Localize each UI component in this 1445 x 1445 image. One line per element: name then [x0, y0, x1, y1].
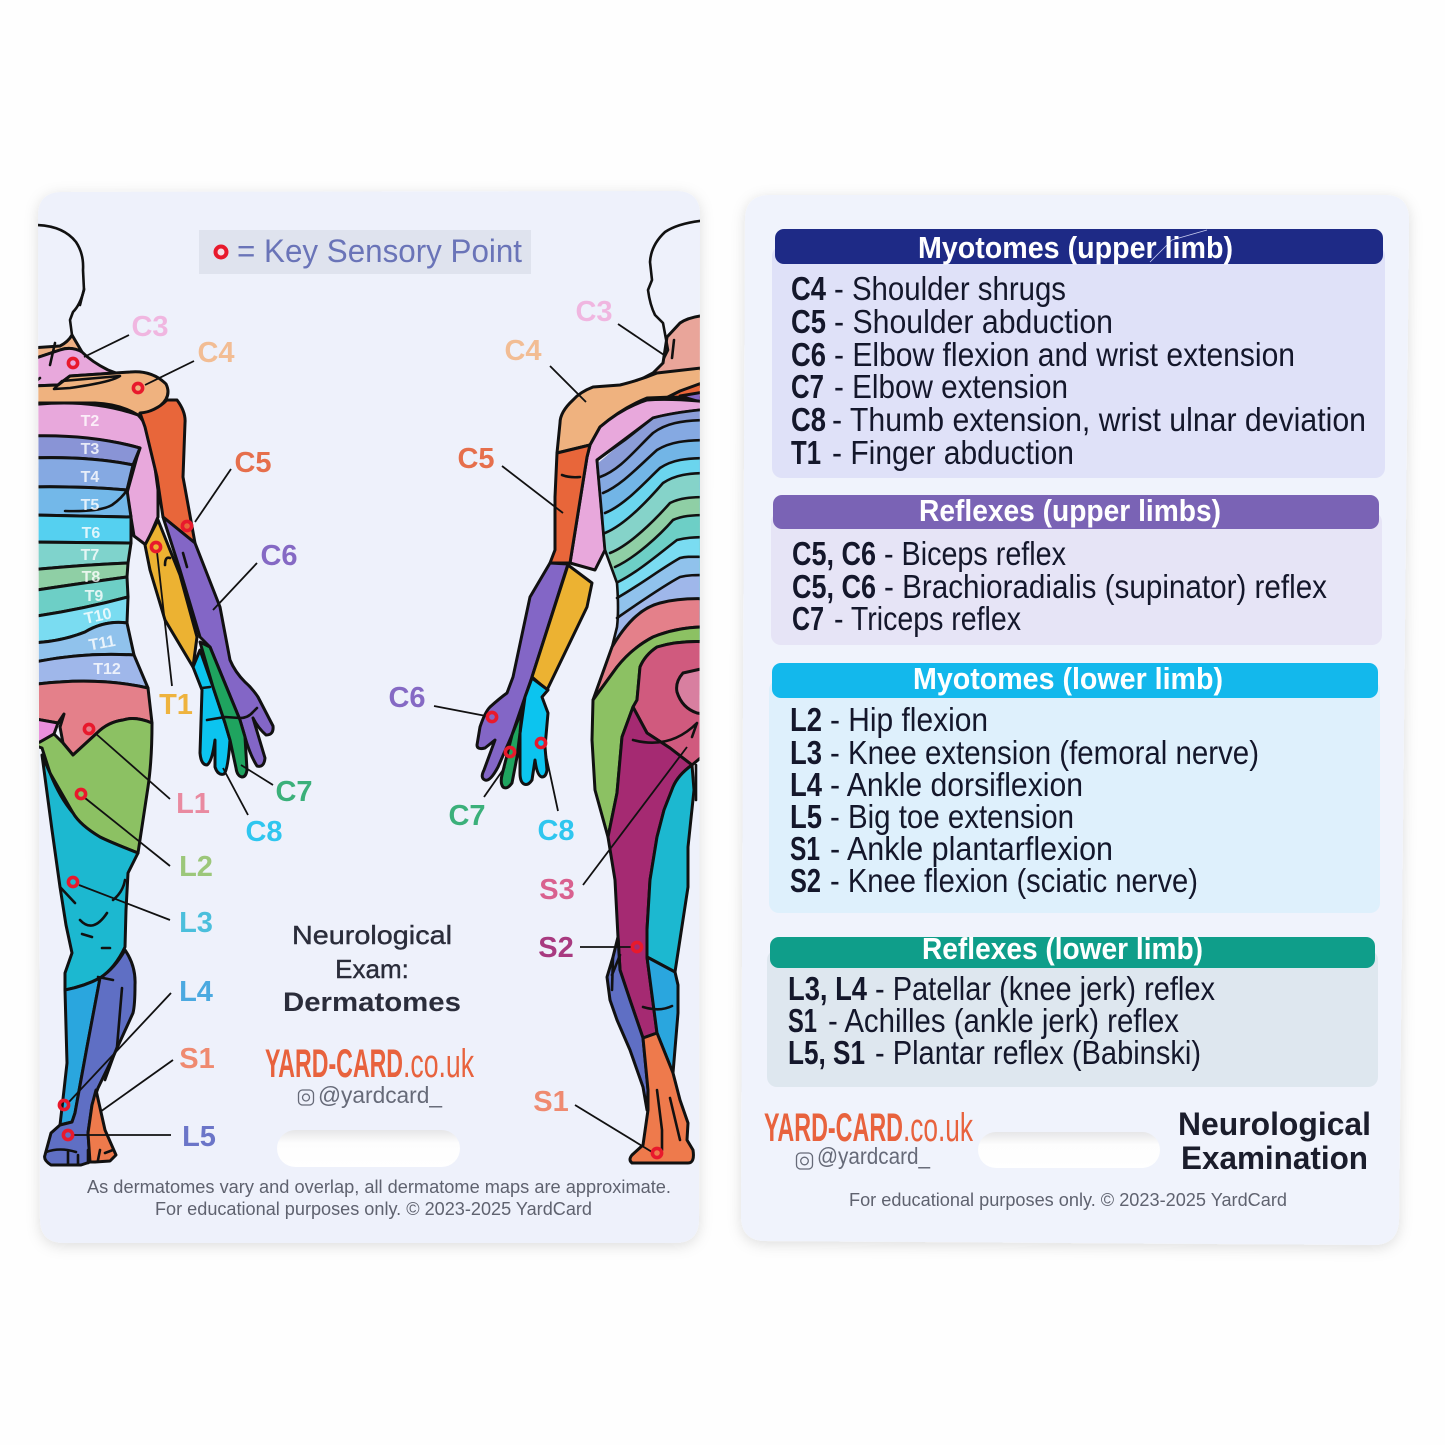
- myotome list upper limb: - Shoulder abduction: [834, 303, 1113, 340]
- back leader lines: [434, 324, 687, 1152]
- dermatome labels: front: C5: [234, 447, 272, 479]
- title: neurological exam dermatomes: Neurological: [292, 920, 452, 950]
- card: myotomes and reflexes back: [741, 195, 1409, 1245]
- reflex list upper limbs: - Brachioradialis (supinator) reflex: [884, 568, 1327, 605]
- brand: yard-card logo: .co.uk: [903, 1106, 974, 1150]
- dermatome labels: front: L2: [179, 851, 213, 883]
- panel: reflexes lower limb: [767, 931, 1378, 1087]
- dermatome labels: back: C8: [537, 815, 575, 847]
- brand: yard-card logo: YARD-CARD: [764, 1106, 903, 1150]
- back band lines: [597, 409, 710, 647]
- myotome list upper limb: C4: [791, 270, 827, 307]
- myotome list lower limb: - Knee extension (femoral nerve): [830, 734, 1259, 771]
- reflex list lower limb: [788, 970, 1215, 1071]
- myotome list upper limb: C6: [791, 336, 826, 373]
- thoracic level labels: T8: [82, 569, 100, 586]
- thoracic level labels: T3: [81, 441, 99, 458]
- footer disclaimer: For educational purposes only. © 2023-2025 YardCard: [155, 1199, 592, 1219]
- back key sensory points: [487, 712, 662, 1158]
- dermatome labels: back: C7: [448, 800, 486, 832]
- myotome list upper limb: C8: [791, 401, 826, 438]
- dermatome labels: back: [388, 296, 613, 1118]
- myotome list upper limb: [791, 270, 1366, 471]
- heading: myotomes upper limb: Myotomes (upper limb): [918, 230, 1233, 265]
- dermatome labels: back: C4: [504, 335, 542, 367]
- dermatome labels: back: C5: [457, 443, 495, 475]
- dermatome labels: front: L5: [182, 1121, 216, 1153]
- footer disclaimer: For educational purposes only. © 2023-2025 YardCard: [849, 1190, 1287, 1210]
- heading: reflexes lower limb: Reflexes (lower limb): [922, 931, 1203, 966]
- title: neurological exam dermatomes: Dermatomes: [283, 987, 461, 1017]
- heading: reflexes upper limbs: [773, 493, 1379, 529]
- brand: yard-card logo: YARD-CARD: [265, 1042, 403, 1086]
- title: neurological examination: Examination: [1181, 1140, 1368, 1176]
- myotome list lower limb: S1: [790, 830, 820, 867]
- myotome list lower limb: L5: [790, 798, 822, 835]
- legend: key sensory point: = Key Sensory Point: [237, 233, 522, 269]
- reflex list upper limbs: C5, C6: [792, 568, 876, 605]
- reflex list lower limb: S1: [788, 1002, 817, 1039]
- title: neurological examination: Neurological: [1178, 1106, 1371, 1142]
- title: neurological exam dermatomes: [283, 920, 461, 1017]
- lanyard slot: [277, 1130, 460, 1167]
- dermatome labels: front: L3: [179, 907, 213, 939]
- myotome list lower limb: L2: [790, 701, 822, 738]
- title: neurological examination: [1178, 1106, 1371, 1176]
- dermatome labels: back: S3: [539, 874, 575, 906]
- thoracic level labels: T12: [93, 661, 121, 678]
- myotome list upper limb: T1: [791, 434, 821, 471]
- infographic: two neurological exam reference cards: [34, 190, 1414, 1252]
- reflex list lower limb: - Patellar (knee jerk) reflex: [875, 970, 1215, 1007]
- heading: myotomes upper limb: [775, 229, 1383, 265]
- myotome list lower limb: - Big toe extension: [830, 798, 1074, 835]
- title: neurological exam dermatomes: Exam:: [335, 954, 409, 984]
- reflex list lower limb: - Plantar reflex (Babinski): [875, 1034, 1201, 1071]
- myotome list upper limb: - Elbow flexion and wrist extension: [834, 336, 1295, 373]
- dermatome labels: front: C6: [260, 540, 298, 572]
- thoracic level labels: [81, 413, 121, 678]
- panel: myotomes lower limb: [769, 661, 1380, 913]
- dermatome labels: front: L4: [179, 976, 213, 1008]
- footer disclaimer: [87, 1177, 671, 1219]
- reflex list lower limb: L5, S1: [788, 1034, 865, 1071]
- myotome list upper limb: - Shoulder shrugs: [834, 270, 1066, 307]
- dermatome labels: back: S1: [533, 1086, 569, 1118]
- reflex list upper limbs: - Triceps reflex: [834, 600, 1021, 637]
- front outline and inner details: [30, 225, 257, 1165]
- front key sensory points: [59, 358, 192, 1140]
- figure: anterior body dermatome map: [30, 225, 273, 1165]
- reflex list upper limbs: C7: [792, 600, 824, 637]
- dermatome labels: front: C3: [131, 311, 169, 343]
- front leader lines: [68, 335, 273, 1135]
- dermatome labels: back: C3: [575, 296, 613, 328]
- myotome list lower limb: - Knee flexion (sciatic nerve): [830, 862, 1198, 899]
- thoracic level labels: T11: [88, 633, 117, 654]
- myotome list lower limb: - Hip flexion: [830, 701, 988, 738]
- thoracic level labels: T10: [83, 605, 113, 628]
- reflex list lower limb: - Achilles (ankle jerk) reflex: [828, 1002, 1179, 1039]
- reflex list upper limbs: [792, 535, 1327, 637]
- front body regions: [30, 335, 273, 1165]
- myotome list upper limb: - Thumb extension, wrist ulnar deviation: [832, 401, 1366, 438]
- footer disclaimer: As dermatomes vary and overlap, all dermatome maps are approximate.: [87, 1177, 671, 1197]
- dermatome labels: front: C7: [275, 776, 313, 808]
- heading: reflexes lower limb: [770, 931, 1375, 968]
- dermatome labels: back: S2: [538, 932, 574, 964]
- thoracic level labels: T2: [81, 413, 99, 430]
- back thoracic bands: [598, 410, 700, 641]
- back outline and inner details: [562, 220, 710, 1150]
- figure: posterior body dermatome map: [434, 220, 710, 1163]
- dermatome labels: front: C4: [197, 337, 235, 369]
- myotome list lower limb: [790, 701, 1259, 899]
- thoracic level labels: T6: [82, 525, 100, 542]
- heading: reflexes upper limbs: Reflexes (upper limbs): [919, 493, 1221, 528]
- myotome list lower limb: S2: [790, 862, 821, 899]
- reflex list lower limb: L3, L4: [788, 970, 868, 1007]
- thoracic level labels: T5: [81, 497, 99, 514]
- reflex list upper limbs: - Biceps reflex: [884, 535, 1066, 572]
- thoracic level labels: T9: [85, 588, 103, 605]
- card: dermatomes front: [30, 191, 710, 1243]
- brand: yard-card logo: .co.uk: [403, 1042, 475, 1086]
- myotome list upper limb: C7: [791, 368, 824, 405]
- myotome list lower limb: L3: [790, 734, 822, 771]
- heading: myotomes lower limb: Myotomes (lower limb): [913, 661, 1223, 696]
- lanyard slot: [978, 1132, 1160, 1168]
- myotome list lower limb: - Ankle plantarflexion: [830, 830, 1113, 867]
- thoracic level labels: T7: [81, 547, 99, 564]
- dermatome labels: front: [131, 311, 313, 1153]
- dermatome labels: front: T1: [159, 689, 193, 721]
- myotome list upper limb: - Elbow extension: [834, 368, 1068, 405]
- back body regions: [557, 315, 710, 570]
- panel: reflexes upper limbs: [771, 493, 1382, 645]
- dermatome labels: front: L1: [176, 788, 210, 820]
- myotome list upper limb: C5: [791, 303, 826, 340]
- myotome list lower limb: L4: [790, 766, 823, 803]
- dermatome labels: front: C8: [245, 816, 283, 848]
- myotome list lower limb: - Ankle dorsiflexion: [830, 766, 1083, 803]
- panel: myotomes upper limb: [772, 229, 1385, 478]
- brand: instagram handle: @yardcard_: [817, 1143, 931, 1169]
- dermatome labels: back: C6: [388, 682, 426, 714]
- back lower body and arm regions: [477, 445, 710, 1163]
- brand: instagram handle: @yardcard_: [318, 1082, 443, 1108]
- thoracic level labels: T4: [81, 469, 99, 486]
- dermatome labels: front: S1: [179, 1043, 215, 1075]
- reflex list upper limbs: C5, C6: [792, 535, 876, 572]
- myotome list upper limb: - Finger abduction: [832, 434, 1074, 471]
- heading: myotomes lower limb: [772, 661, 1378, 698]
